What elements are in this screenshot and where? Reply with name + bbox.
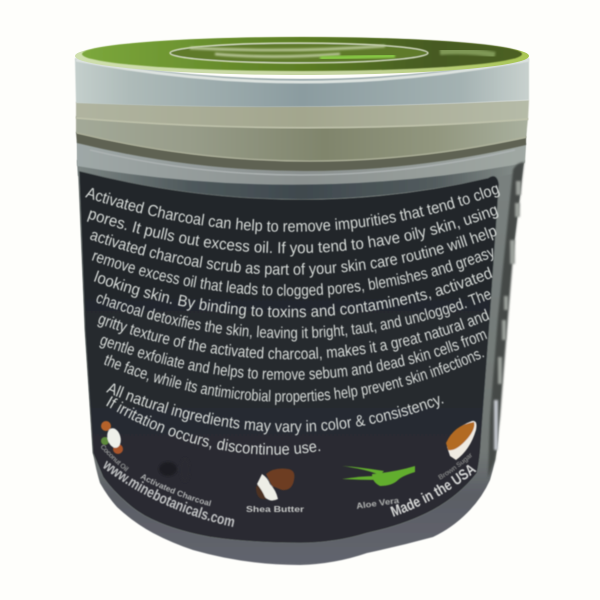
notice: ingredients and irritation: All natural ingredients may vary in color & consistency.	[106, 382, 444, 436]
paragraph: activated charcoal description: remove excess oil that leads to clogged pores, blemishes and greasy	[91, 248, 494, 300]
paragraph: activated charcoal description: gentle exfoliate and helps to remove sebum and dead skin cells from	[98, 330, 488, 381]
label: brown sugar: Brown Sugar	[438, 452, 472, 480]
neck band	[77, 141, 526, 185]
paragraph: activated charcoal description: the face, while its antimicrobial properties help prevent skin infections.	[104, 350, 485, 406]
lid rim highlight	[76, 60, 529, 82]
lid olive band	[76, 116, 528, 161]
jar body	[77, 130, 526, 565]
neck dark band	[77, 160, 525, 200]
lid upper band	[75, 58, 529, 107]
lid top sticker	[75, 37, 529, 75]
label: back panel	[78, 170, 500, 543]
paragraph: activated charcoal description: activated charcoal scrub as part of your skin care routine will help	[90, 226, 497, 278]
icon: aloe vera	[342, 466, 415, 486]
notice: ingredients and irritation	[106, 382, 444, 456]
lid khaki ridge line	[76, 118, 528, 128]
groove highlight	[77, 133, 526, 161]
icon: coconut	[101, 421, 123, 454]
label: activated charcoal: Activated Charcoal	[140, 474, 212, 506]
lid khaki band	[76, 100, 529, 128]
paragraph: activated charcoal description: looking skin. By binding to toxins and contaminents, activated	[94, 266, 493, 320]
paragraph: activated charcoal description: pores. It pulls out excess oil. If you tend to have oily skin, using	[86, 206, 499, 258]
jar	[74, 36, 530, 566]
label: side panel	[488, 162, 524, 478]
paragraph: activated charcoal description: gritty texture of the activated charcoal, makes it a great natural and	[96, 308, 490, 361]
paragraph: activated charcoal description: charcoal detoxifies the skin, leaving it bright, taut, and unclogged. The	[96, 290, 492, 342]
label: coconut oil: Coconut Oil	[100, 444, 130, 472]
notice: ingredients and irritation: If irritation occurs, discontinue use.	[106, 396, 321, 456]
sticker green accent	[320, 56, 395, 58]
dark groove	[76, 132, 526, 171]
sticker side pattern	[440, 51, 495, 55]
made in the usa: Made in the USA	[390, 464, 477, 518]
neck highlight lines	[90, 150, 515, 175]
sticker oval frame	[170, 43, 428, 63]
label: shea butter: Shea Butter	[246, 504, 305, 514]
icon: brown sugar	[446, 421, 476, 460]
icon: shea butter	[256, 469, 294, 501]
website url: www.minebotanicals.com	[102, 460, 235, 528]
paragraph: activated charcoal description	[84, 184, 500, 406]
side panel text	[494, 181, 521, 450]
icon: activated charcoal	[159, 458, 190, 482]
label: aloe vera: Aloe Vera	[356, 495, 400, 511]
sticker title lines	[190, 46, 385, 56]
paragraph: activated charcoal description: Activated Charcoal can help to remove impurities that tend to clog	[84, 184, 500, 235]
